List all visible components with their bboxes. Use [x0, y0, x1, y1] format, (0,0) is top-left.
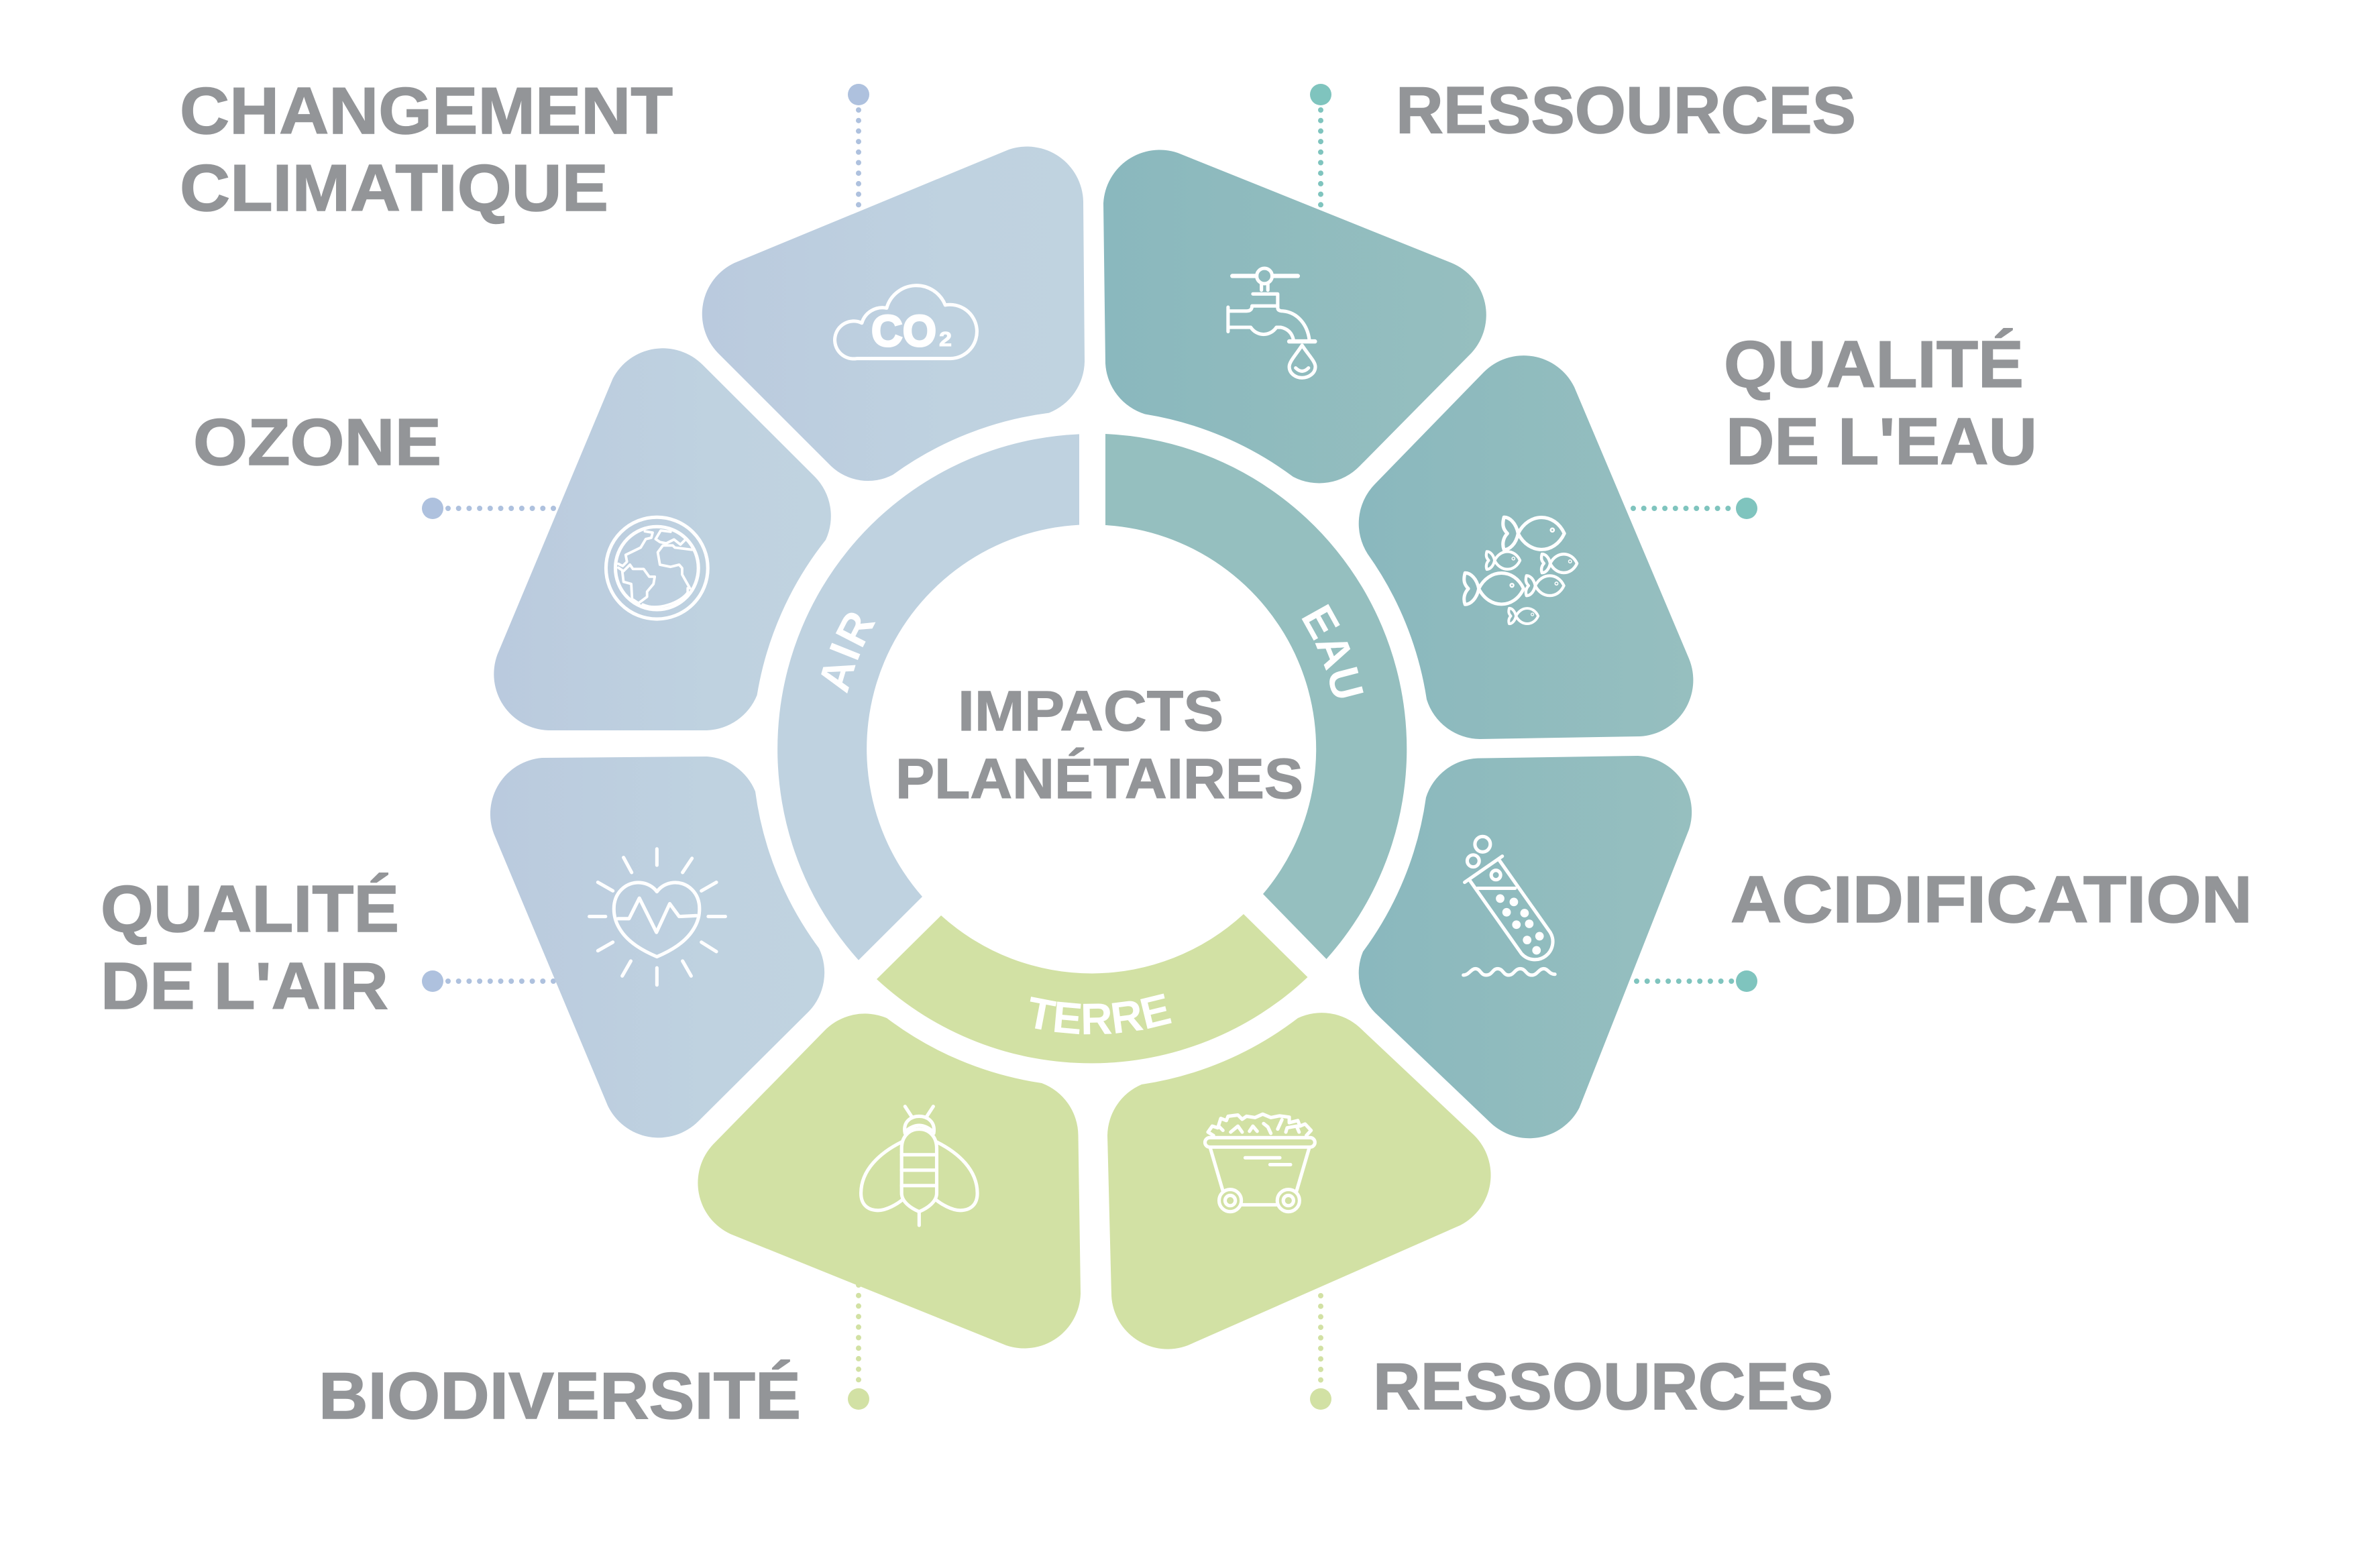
label: biodiversité: BIODIVERSITÉ — [319, 1359, 801, 1433]
panel: qualité de l'air — [490, 757, 824, 1137]
icon: globe — [606, 517, 708, 619]
label: qualité de l'eau — [1724, 327, 2037, 478]
ring label: AIR: AIR — [821, 613, 876, 693]
label: ozone: OZONE — [193, 405, 441, 479]
center title: IMPACTS — [958, 679, 1223, 742]
connector: ressources eau — [1310, 84, 1331, 205]
icon: CO2 cloud — [835, 286, 977, 359]
panel: qualité de l'eau — [1359, 355, 1693, 739]
center title — [895, 679, 1303, 810]
ring label: EAU: EAU — [1301, 604, 1364, 697]
label: qualité de l'eau: QUALITÉ — [1724, 327, 2024, 401]
label: acidification: ACIDIFICATION — [1731, 862, 2252, 936]
label: changement climatique: CLIMATIQUE — [180, 151, 608, 225]
icon: fish school — [1464, 517, 1577, 624]
label: qualité de l'air: QUALITÉ — [101, 872, 399, 946]
label: changement climatique: CHANGEMENT — [180, 74, 673, 148]
label: ressources eau: RESSOURCES — [1396, 73, 1856, 147]
panel: biodiversité — [698, 1013, 1081, 1348]
icon: bee — [861, 1107, 977, 1225]
panel: ressources eau — [1103, 150, 1486, 483]
connector: ressources terre — [1310, 1296, 1331, 1410]
label: changement climatique — [180, 74, 673, 225]
ring label: TERRE: TERRE — [1030, 994, 1172, 1034]
panel: acidification — [1359, 756, 1692, 1138]
label: qualité de l'air: DE L'AIR — [101, 949, 388, 1023]
panel: ressources terre — [1107, 1013, 1491, 1349]
connector: changement climatique — [848, 84, 869, 205]
icon: CO2 cloud: 2 — [939, 327, 952, 351]
label: ressources terre: RESSOURCES — [1373, 1349, 1833, 1423]
icon: heart with pulse — [590, 849, 725, 985]
ring segment: TERRE — [877, 914, 1308, 1064]
connector: qualité de l'eau — [1633, 498, 1757, 519]
ring segment: AIR — [777, 434, 1079, 960]
icon: water tap — [1228, 268, 1315, 378]
connector: qualité de l'air — [422, 970, 554, 992]
ring segment: EAU — [1105, 434, 1407, 959]
panel: ozone — [494, 348, 831, 730]
connector: acidification — [1637, 970, 1757, 992]
label: qualité de l'air — [101, 872, 399, 1023]
icon: mine cart — [1205, 1114, 1315, 1212]
icon: CO2 cloud: CO — [871, 306, 936, 355]
center title: PLANÉTAIRES — [895, 747, 1303, 810]
panel: changement climatique — [702, 147, 1085, 481]
connector: biodiversité — [848, 1285, 869, 1410]
connector: ozone — [422, 498, 557, 519]
label: qualité de l'eau: DE L'EAU — [1726, 404, 2037, 478]
icon: test tube — [1464, 836, 1555, 975]
